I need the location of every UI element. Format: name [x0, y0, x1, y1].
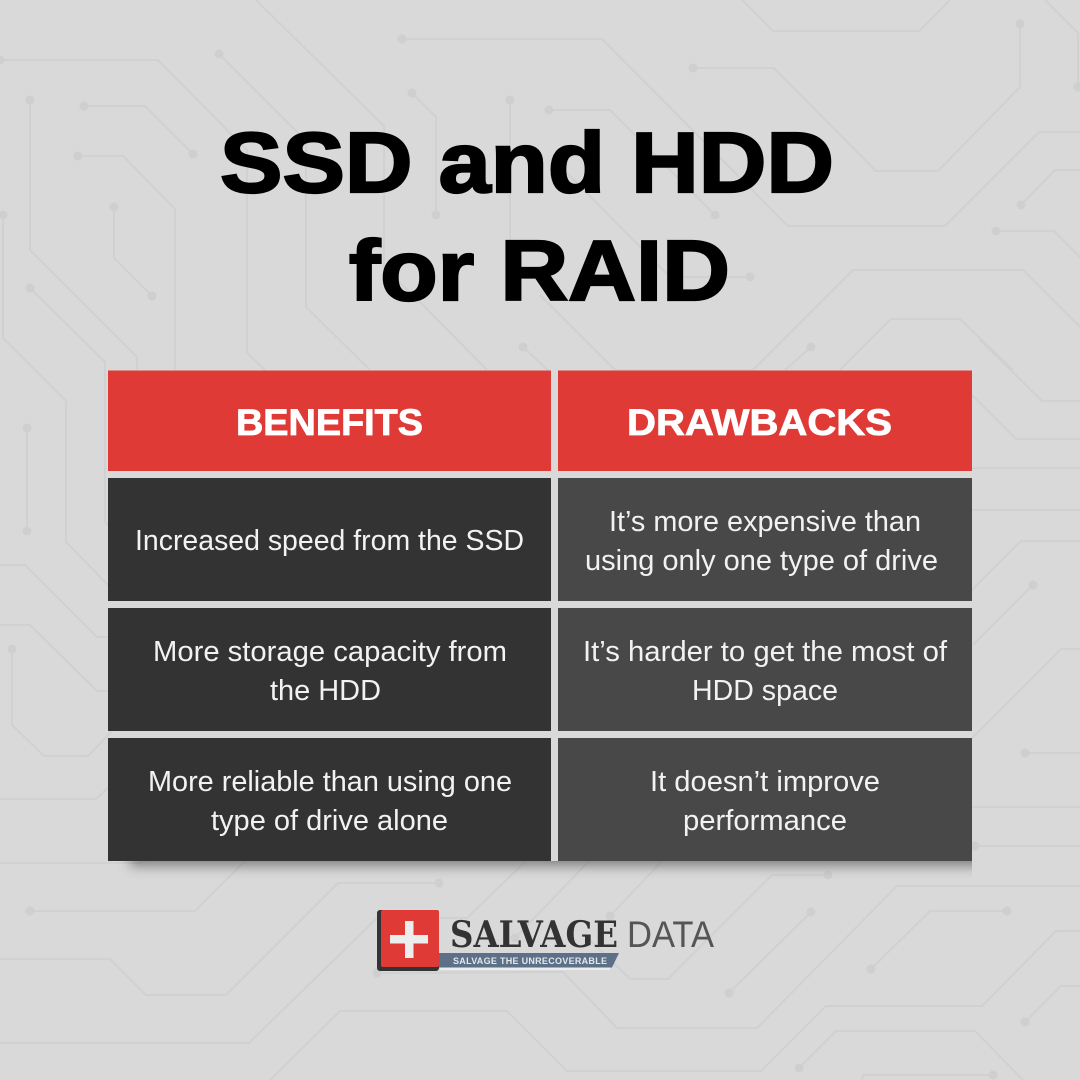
drawback row 2: HDD space: [692, 675, 838, 707]
drawback row 1: using only one type of drive: [585, 545, 938, 577]
logo banner: [438, 953, 619, 970]
drawback row 3: It doesn’t improve: [650, 766, 880, 798]
logo wordmark: SALVAGE: [450, 914, 618, 956]
drawback row 1: It’s more expensive than: [609, 506, 921, 538]
title: SSD and HDD: [220, 116, 834, 211]
icon: red square with white cross: [377, 910, 439, 971]
title: for RAID: [349, 224, 730, 319]
drawback row 3: [558, 738, 972, 861]
title: [220, 116, 834, 319]
benefit row 3: More reliable than using one: [148, 766, 512, 798]
panel: drawbacks column: [558, 370, 972, 861]
heading: drawbacks: [558, 370, 972, 471]
drawback row 2: [558, 608, 972, 731]
benefit row 1: Increased speed from the SSD: [135, 525, 524, 557]
drawback row 3: performance: [683, 805, 847, 837]
logo banner: SALVAGE THE UNRECOVERABLE: [453, 956, 607, 966]
logo: SalvageData: [377, 910, 714, 971]
panel: benefits column: [108, 370, 551, 861]
benefit row 3: type of drive alone: [211, 805, 448, 837]
heading: drawbacks: DRAWBACKS: [627, 402, 892, 443]
heading: benefits: [108, 370, 551, 471]
drawback row 1: [558, 478, 972, 601]
benefit row 2: the HDD: [270, 675, 381, 707]
benefit row 2: [108, 608, 551, 731]
logo wordmark: DATA: [627, 914, 714, 955]
benefit row 1: [108, 478, 551, 601]
benefit row 2: More storage capacity from: [153, 636, 507, 668]
heading: benefits: BENEFITS: [236, 402, 423, 443]
table drop shadow: [124, 861, 972, 874]
drawback row 2: It’s harder to get the most of: [583, 636, 948, 668]
benefit row 3: [108, 738, 551, 861]
